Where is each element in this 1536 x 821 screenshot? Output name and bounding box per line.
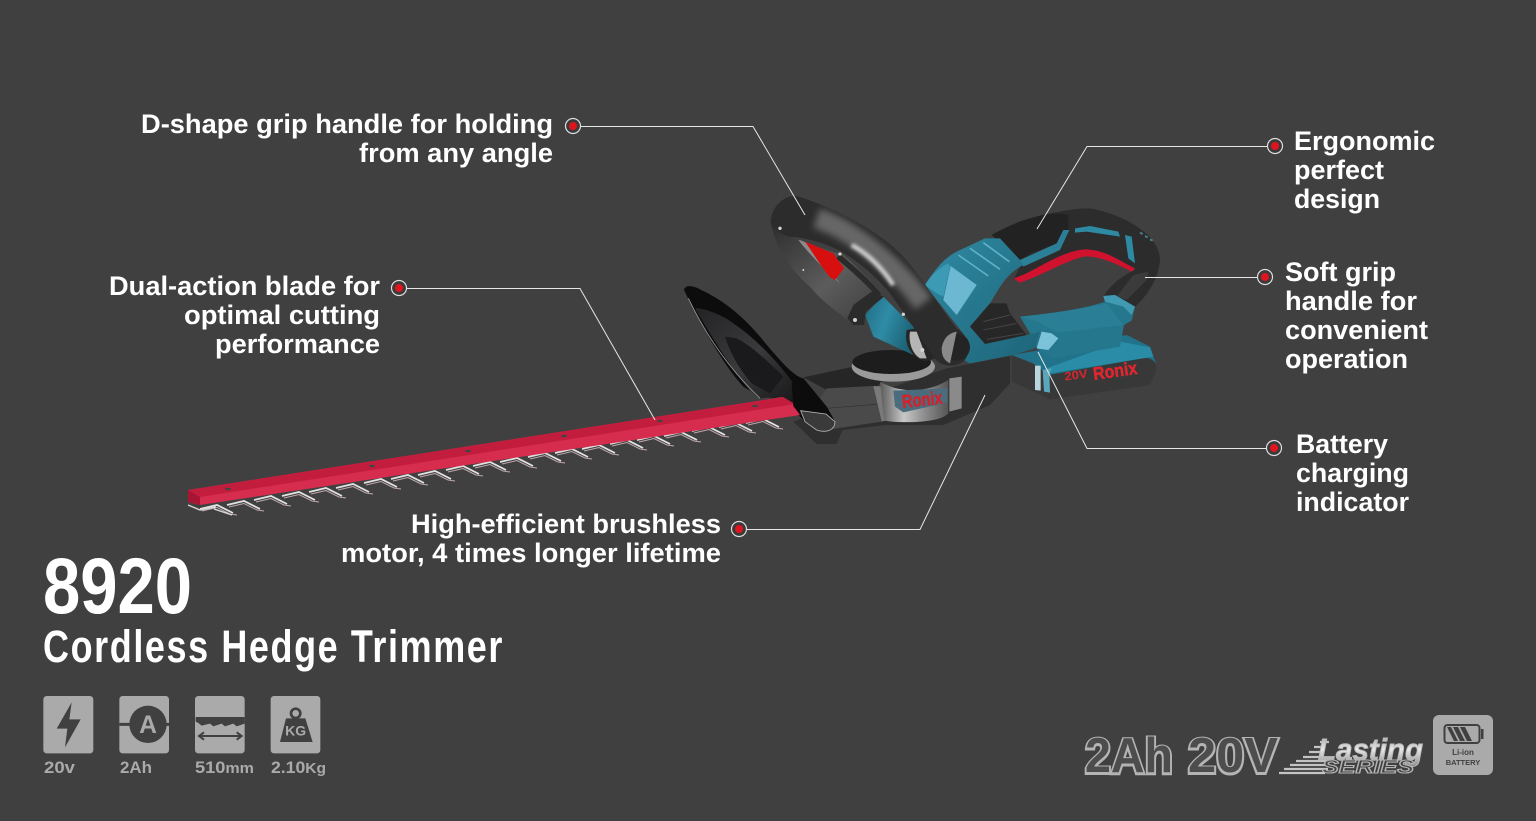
battery capacity badge: 2Ah — [1085, 730, 1173, 784]
back arm — [771, 222, 883, 325]
motor tube — [863, 297, 917, 355]
lower grip — [1020, 295, 1135, 358]
callout: brushless motor: High-efficient brushless — [411, 509, 721, 539]
rear handle — [992, 208, 1160, 308]
li-ion battery badge: BATTERY — [1446, 758, 1480, 767]
lasting series logo: SERIES — [1322, 757, 1414, 777]
model number: 8920 — [43, 541, 192, 630]
lasting series logo: Lasting — [1318, 732, 1423, 767]
spec labels: 510mm — [195, 758, 254, 777]
blade guard — [684, 286, 835, 431]
callout: D-shape grip: from any angle — [359, 138, 553, 168]
lasting series logo — [1279, 732, 1423, 777]
collar — [847, 292, 884, 325]
callout: ergonomic design: Ergonomic — [1294, 126, 1435, 156]
callout: battery indicator — [1038, 352, 1409, 517]
icon: blade length — [195, 696, 245, 753]
callout: brushless motor: motor, 4 times longer lifetime — [341, 538, 721, 568]
icon: voltage bolt — [43, 696, 93, 753]
li-ion battery badge — [1433, 715, 1493, 775]
spec icons — [43, 696, 320, 753]
callout: battery indicator: Battery — [1296, 429, 1388, 459]
blade teeth — [188, 419, 783, 515]
joint chrome — [906, 328, 935, 362]
battery — [1012, 335, 1157, 399]
front band — [771, 196, 968, 366]
icon: weight: KG — [285, 723, 306, 739]
spec labels — [44, 758, 326, 777]
callout: soft grip — [1145, 257, 1428, 374]
icon: ampere — [119, 696, 169, 753]
li-ion battery badge: Li-ion — [1452, 748, 1474, 757]
callout: soft grip: operation — [1285, 344, 1408, 374]
battery capacity badge — [1085, 729, 1278, 784]
screws — [778, 227, 924, 352]
callout: soft grip: Soft grip — [1285, 257, 1396, 287]
blade bar — [188, 397, 800, 505]
battery capacity badge: 2Ah — [1085, 729, 1173, 783]
pivot cap — [943, 334, 970, 361]
trimmer rear assembly — [925, 208, 1160, 399]
callout: soft grip: handle for — [1285, 286, 1417, 316]
callout: ergonomic design: perfect — [1294, 155, 1384, 185]
spec labels: 2.10Kg — [271, 758, 326, 777]
callout: soft grip: convenient — [1285, 315, 1428, 345]
trigger — [805, 242, 844, 280]
icon: weight — [271, 696, 320, 753]
callout: dual-action blade: Dual-action blade for — [109, 271, 380, 301]
callout: dual-action blade: optimal cutting — [184, 300, 380, 330]
battery: 20V — [1063, 367, 1089, 384]
battery capacity badge: 20V — [1188, 730, 1278, 784]
callout: ergonomic design — [1037, 126, 1435, 229]
blade guard front rim — [792, 378, 835, 431]
gearbox — [793, 350, 1010, 444]
callout: ergonomic design: design — [1294, 184, 1380, 214]
callout: D-shape grip — [141, 109, 805, 215]
callout: dual-action blade — [109, 271, 655, 420]
battery: Ronix — [1092, 358, 1138, 384]
callout: D-shape grip: D-shape grip handle for holding — [141, 109, 553, 139]
battery capacity badge: 20V — [1188, 729, 1278, 783]
callout: dual-action blade: performance — [215, 329, 380, 359]
spec labels: 20v — [44, 758, 76, 777]
Ronix badge: Ronix — [901, 387, 944, 412]
callout: brushless motor — [341, 395, 985, 568]
callout: battery indicator: indicator — [1296, 487, 1409, 517]
callout: battery indicator: charging — [1296, 458, 1409, 488]
D-shape front handle — [771, 196, 970, 366]
icon: ampere: A — [139, 712, 157, 739]
spec labels: 2Ah — [120, 758, 152, 777]
main teal housing — [925, 238, 1040, 363]
product title: Cordless Hedge Trimmer — [43, 621, 504, 672]
